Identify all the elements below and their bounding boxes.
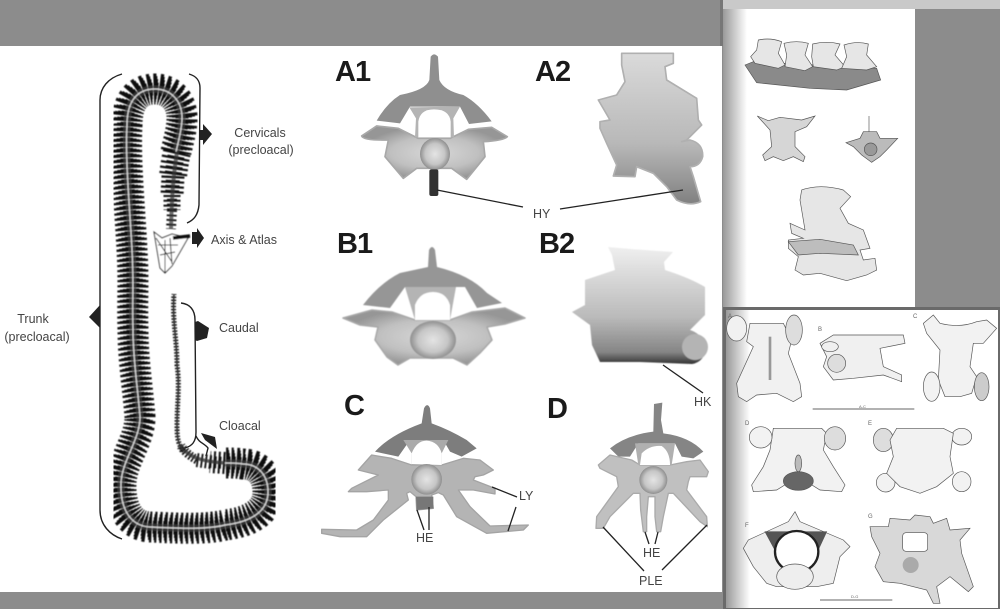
panel letter A1: A1	[335, 56, 371, 88]
tiny figure letters: D-G	[851, 594, 858, 599]
tiny figure letters	[728, 314, 918, 599]
engravings	[745, 39, 898, 281]
label and leaders: HE on C: HE	[416, 531, 433, 545]
engraved vertebral series	[745, 39, 881, 90]
labels and leaders: HE and PLE on D	[603, 525, 707, 588]
label: caudal: Caudal	[219, 321, 259, 335]
tiny figure letters: G	[868, 514, 873, 520]
neck tapering	[173, 152, 177, 176]
tail tapering	[210, 462, 225, 463]
skeleton: snake body	[121, 89, 268, 528]
tiny figure letters: D	[745, 421, 750, 427]
drawing D	[749, 427, 846, 492]
drawing F	[743, 512, 850, 589]
panel letter A2: A2	[535, 56, 570, 88]
drawing B	[820, 335, 905, 382]
label and leader: HK	[663, 365, 712, 409]
label and leaders: LY: LY	[519, 489, 534, 503]
drawing A	[727, 315, 802, 402]
vertebra D	[596, 403, 708, 532]
arrow: axis and atlas	[192, 228, 204, 248]
panel: vertebra engraving sheet top	[720, 0, 915, 307]
panel: browser strip top right	[723, 0, 1000, 9]
trunk bracket	[100, 74, 122, 539]
panel: vertebra engraving sheet bottom	[723, 307, 1000, 609]
drawing E	[873, 428, 972, 493]
label: trunk: Trunk	[17, 312, 49, 326]
vertebra A1	[362, 54, 507, 196]
panel letter C: C	[344, 390, 365, 422]
label and leader: HK: HK	[694, 395, 712, 409]
panel: main figure sheet	[0, 46, 722, 592]
label and leaders: LY	[492, 487, 534, 531]
panel letter D: D	[547, 393, 568, 425]
panel: snake skeleton diagram	[4, 74, 294, 539]
tiny figure letters: A-C	[859, 404, 866, 409]
engraved vertebra lateral view	[788, 187, 877, 281]
drawing G	[870, 515, 973, 603]
label: cervicals precloacal: (precloacal)	[228, 143, 294, 157]
label: axis and atlas: Axis & Atlas	[211, 233, 277, 247]
label: cervicals: Cervicals	[234, 126, 286, 140]
caudal and cloacal bracket	[181, 303, 208, 456]
engraved vertebra anterior view	[846, 116, 898, 162]
labels and leaders: HE and PLE on D: PLE	[639, 574, 663, 588]
vertebra A2	[598, 53, 703, 204]
tiny figure letters: F	[745, 523, 749, 529]
scale bar D-G	[820, 598, 892, 601]
tiny figure letters: E	[868, 421, 872, 427]
scale bar A-C	[813, 407, 914, 410]
label: cloacal: Cloacal	[219, 419, 261, 433]
vertebra C	[322, 405, 528, 537]
tiny figure letters: A	[728, 314, 732, 320]
label and leaders: HE on C	[416, 507, 433, 545]
tiny figure letters: B	[818, 327, 822, 333]
label and leaders: HY	[437, 190, 683, 221]
drawing C	[923, 315, 997, 401]
skull	[154, 232, 190, 273]
arrow: caudal	[195, 321, 209, 341]
arrow: trunk	[89, 305, 100, 328]
panel letter B2: B2	[539, 228, 574, 260]
arrow: cloacal	[201, 433, 217, 449]
tiny figure letters: C	[913, 314, 918, 320]
arrow: cervicals	[200, 124, 212, 145]
labels and leaders: HE and PLE on D: HE	[643, 546, 660, 560]
engraved vertebra ventral view	[757, 116, 815, 162]
label and leaders: HY: HY	[533, 207, 551, 221]
panel letter B1: B1	[337, 228, 373, 260]
vertebra B2	[572, 247, 708, 364]
label: trunk precloacal: (precloacal)	[4, 330, 70, 344]
cervical bracket	[187, 74, 200, 223]
vertebra B1	[343, 247, 525, 365]
